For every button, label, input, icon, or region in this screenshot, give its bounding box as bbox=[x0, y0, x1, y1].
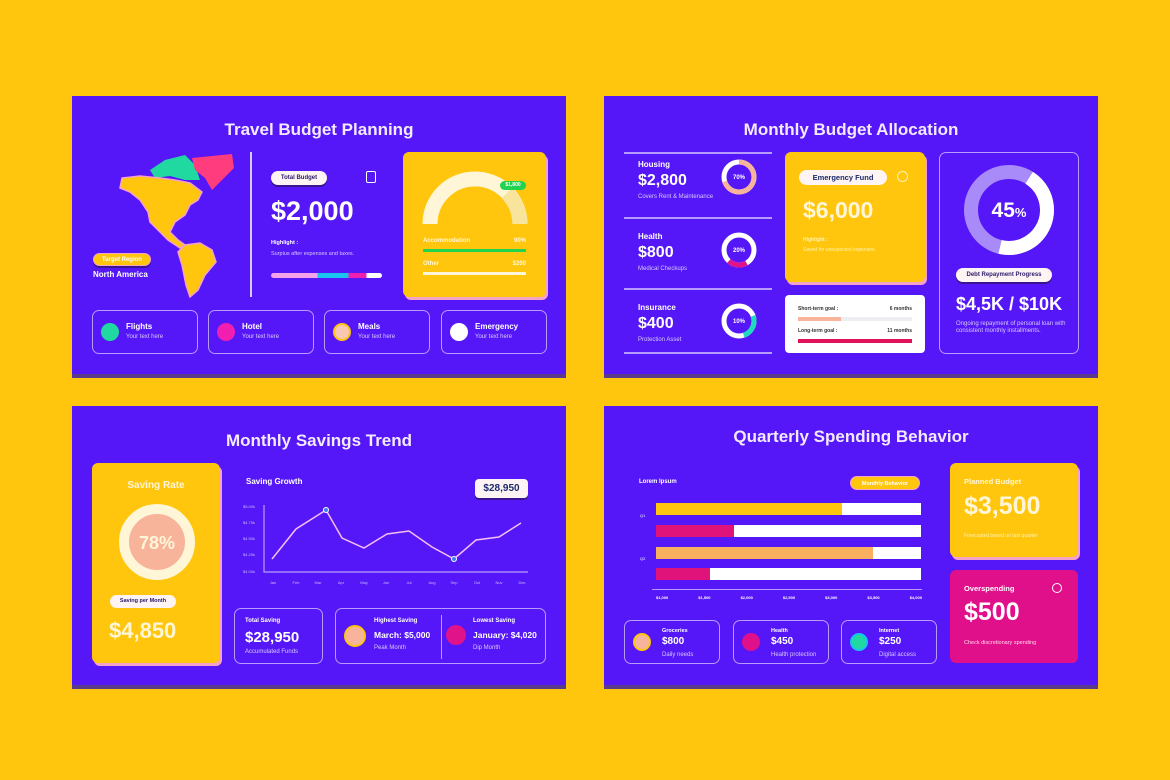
card: emergency fund: $6,000 bbox=[803, 197, 873, 223]
chart: saving growth: Nov bbox=[495, 580, 503, 585]
category: internet: Internet bbox=[879, 628, 899, 634]
card: goals: Long-term goal : bbox=[798, 328, 837, 334]
card: overspending: $500 bbox=[964, 598, 1020, 626]
divider bbox=[250, 152, 252, 297]
card: emergency fund: Emergency Fund bbox=[813, 173, 873, 182]
total saving box bbox=[234, 608, 323, 664]
total budget: $2,000 bbox=[271, 196, 354, 226]
highest/lowest box: January: $4,020 bbox=[473, 630, 537, 640]
card: goals: Short-term goal : bbox=[798, 306, 838, 312]
category: internet: $250 bbox=[879, 636, 901, 647]
card: planned budget bbox=[950, 463, 1078, 557]
card: saving rate: Saving per Month bbox=[120, 598, 166, 604]
title: Monthly Savings Trend bbox=[226, 431, 412, 450]
bar chart: $2,500 bbox=[783, 595, 795, 600]
chart: saving growth: Dec bbox=[518, 580, 526, 585]
title: Monthly Budget Allocation bbox=[744, 120, 958, 139]
highest/lowest box: Dip Month bbox=[473, 645, 500, 651]
bar chart: $1,000 bbox=[656, 595, 668, 600]
chart: saving growth: Jul bbox=[406, 580, 412, 585]
panel: travel budget planning bbox=[72, 96, 566, 374]
highest/lowest box: Lowest Saving bbox=[473, 618, 515, 624]
total saving box: $28,950 bbox=[245, 629, 299, 646]
allocation list: Protection Asset bbox=[638, 337, 681, 343]
bar chart: $4,000 bbox=[910, 595, 922, 600]
card: debt repayment: Debt Repayment Progress bbox=[966, 272, 1042, 278]
card: debt repayment: $4,5K / $10K bbox=[956, 294, 1062, 314]
category: groceries bbox=[624, 620, 720, 664]
category: groceries: Daily needs bbox=[662, 652, 693, 658]
chart: saving growth: Mar bbox=[315, 580, 322, 585]
card: saving rate: 78% bbox=[139, 533, 175, 553]
allocation list: Covers Rent & Maintenance bbox=[638, 194, 713, 200]
category: internet: Digital access bbox=[879, 652, 916, 658]
chart: saving growth: $5.00k bbox=[243, 504, 255, 509]
category: meals bbox=[324, 310, 430, 354]
allocation list: Housing bbox=[638, 160, 670, 169]
card: emergency fund bbox=[785, 152, 925, 282]
region label: North America bbox=[93, 270, 148, 279]
chart: saving growth: Feb bbox=[293, 580, 300, 585]
highest/lowest box: Highest Saving bbox=[374, 618, 417, 624]
category: meals: Your text here bbox=[358, 334, 395, 340]
card: gauge: Accommodation bbox=[423, 238, 470, 244]
category: health: $450 bbox=[771, 636, 793, 647]
card: overspending bbox=[950, 570, 1078, 663]
card: overspending: Overspending bbox=[964, 584, 1014, 593]
panel: monthly savings trend bbox=[72, 406, 566, 685]
target region pill: Target Region bbox=[102, 257, 142, 263]
card: gauge: $200 bbox=[513, 261, 526, 267]
category: flights: Your text here bbox=[126, 334, 163, 340]
category: hotel: Hotel bbox=[242, 322, 262, 331]
category: emergency: Your text here bbox=[475, 334, 512, 340]
chart: saving growth: Sep bbox=[450, 580, 458, 585]
total budget: Highlight : bbox=[271, 240, 298, 246]
bar chart: Monthly Behavior bbox=[862, 481, 908, 487]
chart: saving growth: May bbox=[360, 580, 368, 585]
allocation list: $800 bbox=[638, 244, 674, 261]
total budget: Surplus after expenses and taxes. bbox=[271, 251, 354, 257]
panel: monthly budget allocation bbox=[604, 96, 1098, 374]
chart: saving growth: Saving Growth bbox=[246, 477, 302, 486]
chart: saving growth bbox=[243, 477, 528, 585]
total budget bbox=[271, 171, 382, 278]
category: hotel bbox=[208, 310, 314, 354]
card: gauge: Other bbox=[423, 261, 439, 267]
allocation list: $400 bbox=[638, 315, 674, 332]
card: planned budget: Forecasted based on last quarter bbox=[964, 533, 1037, 539]
highest/lowest box: March: $5,000 bbox=[374, 630, 430, 640]
value pill: $28,950 bbox=[483, 483, 520, 494]
card: gauge bbox=[403, 152, 546, 297]
chart: saving growth: Oct bbox=[474, 580, 481, 585]
bar chart: $3,500 bbox=[867, 595, 880, 600]
card: saving rate: Saving Rate bbox=[127, 480, 185, 491]
chart: saving growth: Jun bbox=[383, 580, 389, 585]
category: emergency: Emergency bbox=[475, 322, 518, 331]
chart: saving growth: $4.25k bbox=[243, 552, 255, 557]
category: groceries: $800 bbox=[662, 636, 684, 647]
chart: saving growth: Aug bbox=[428, 580, 436, 585]
category: hotel: Your text here bbox=[242, 334, 279, 340]
card: saving rate: $4,850 bbox=[109, 618, 176, 643]
icon: receipt bbox=[366, 171, 376, 183]
category: internet bbox=[841, 620, 937, 664]
category: groceries: Groceries bbox=[662, 628, 688, 634]
panel: quarterly spending behavior bbox=[604, 406, 1098, 685]
category: flights: Flights bbox=[126, 322, 152, 331]
allocation list: $2,800 bbox=[638, 172, 687, 189]
chart: saving growth: $4.50k bbox=[243, 536, 255, 541]
allocation list: Medical Checkups bbox=[638, 266, 687, 272]
allocation list: Health bbox=[638, 232, 662, 241]
bar chart: Lorem Ipsum bbox=[639, 479, 677, 485]
bar chart: $1,500 bbox=[698, 595, 711, 600]
card: saving rate bbox=[92, 463, 220, 663]
map: americas bbox=[119, 154, 234, 298]
bar chart: $3,000 bbox=[825, 595, 837, 600]
chart: saving growth: $4.75k bbox=[243, 520, 255, 525]
card: gauge: 90% bbox=[514, 238, 526, 244]
highest/lowest box: Peak Month bbox=[374, 645, 406, 651]
chart: saving growth: Apr bbox=[338, 580, 345, 585]
donuts: 10% bbox=[733, 319, 746, 325]
card: goals: 6 months bbox=[890, 306, 912, 312]
card: goals bbox=[785, 295, 925, 353]
card: debt repayment: 45% bbox=[992, 199, 1027, 222]
bar chart: $2,000 bbox=[741, 595, 753, 600]
card: emergency fund: Highlight : bbox=[803, 237, 828, 243]
allocation list bbox=[624, 152, 772, 354]
title: Quarterly Spending Behavior bbox=[733, 427, 969, 446]
label pill: $1,800 bbox=[505, 182, 521, 188]
chart: saving growth: $4.00k bbox=[243, 569, 255, 574]
category: health: Health bbox=[771, 628, 788, 634]
category: health bbox=[733, 620, 829, 664]
allocation list: Insurance bbox=[638, 303, 676, 312]
target region pill bbox=[93, 253, 151, 266]
donuts: 70% bbox=[733, 175, 746, 181]
card: goals: 11 months bbox=[887, 328, 912, 334]
chart: saving growth: Jan bbox=[270, 580, 276, 585]
donuts: 20% bbox=[733, 248, 746, 254]
bar chart: Q1 bbox=[640, 513, 645, 518]
category: flights bbox=[92, 310, 198, 354]
highest/lowest box bbox=[335, 608, 546, 664]
donuts bbox=[722, 160, 757, 338]
category: health: Health protection bbox=[771, 652, 816, 658]
category: emergency bbox=[441, 310, 547, 354]
total budget: Total Budget bbox=[281, 175, 317, 181]
category: meals: Meals bbox=[358, 322, 380, 331]
label pill bbox=[500, 181, 526, 190]
progress bar bbox=[271, 273, 382, 278]
card: debt repayment bbox=[939, 152, 1079, 354]
title: Travel Budget Planning bbox=[225, 120, 413, 139]
total saving box: Total Saving bbox=[245, 618, 280, 624]
total saving box: Accumulated Funds bbox=[245, 649, 298, 655]
value pill bbox=[475, 479, 528, 498]
bar chart: Q2 bbox=[640, 556, 645, 561]
card: debt repayment: Ongoing repayment of personal loan with consistent monthly installments. bbox=[956, 321, 1065, 334]
card: overspending: Check discretionary spending bbox=[964, 640, 1036, 646]
card: planned budget: Planned Budget bbox=[964, 477, 1021, 486]
card: emergency fund: Saved for unexpected expenses bbox=[803, 247, 874, 253]
card: planned budget: $3,500 bbox=[964, 492, 1040, 520]
bar chart bbox=[639, 476, 922, 600]
